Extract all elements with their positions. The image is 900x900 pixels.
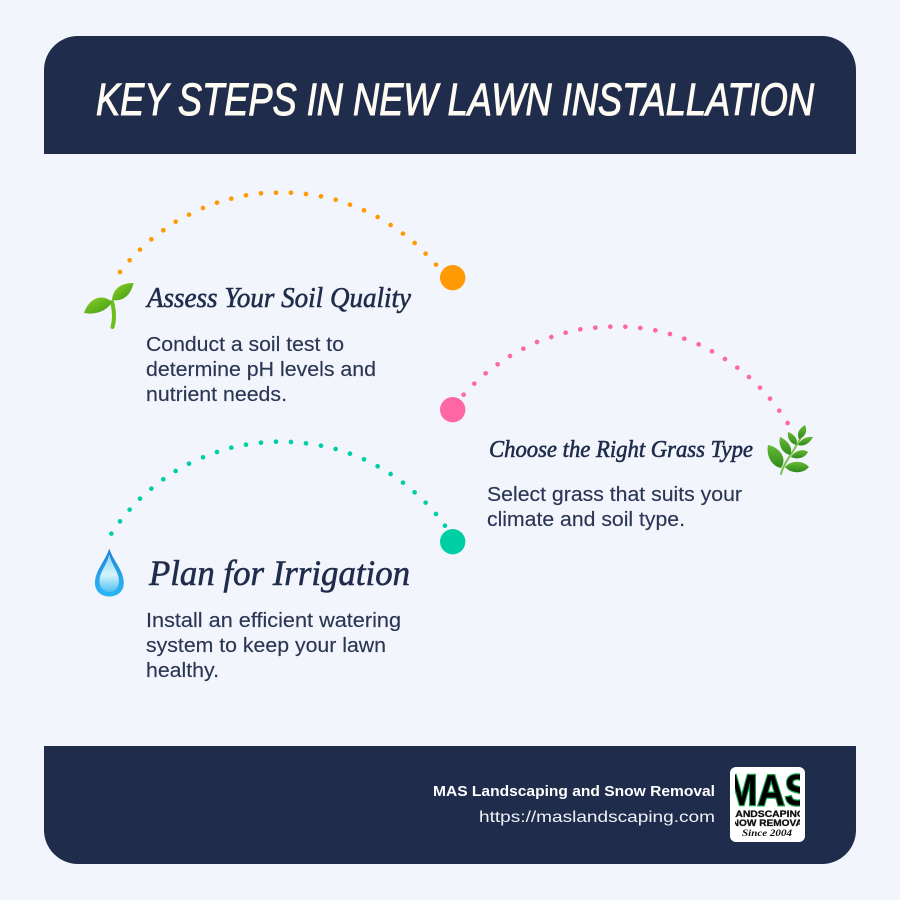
description: nutrient needs.: [146, 384, 287, 406]
company name: MAS Landscaping and Snow Removal: [433, 784, 715, 800]
description: climate and soil type.: [487, 509, 685, 531]
heading: Assess Your Soil Quality: [145, 282, 411, 314]
heading: Plan for Irrigation: [148, 553, 410, 593]
dotted arc: teal: [109, 439, 447, 536]
description: system to keep your lawn: [146, 635, 386, 657]
description: [146, 334, 376, 406]
description: determine pH levels and: [146, 359, 376, 381]
footer banner: [44, 746, 856, 864]
heading: Choose the Right Grass Type: [489, 437, 753, 463]
pink node: [440, 397, 465, 422]
logo: MAS: [726, 766, 810, 815]
description: [146, 610, 401, 682]
step: plan for irrigation: [95, 439, 465, 682]
icon: seedling: [84, 283, 134, 327]
description: Conduct a soil test to: [146, 334, 344, 356]
logo: Since 2004: [742, 829, 792, 839]
description: healthy.: [146, 660, 219, 682]
logo: LANDSCAPING: [729, 809, 805, 820]
orange node: [440, 265, 465, 290]
step: choose grass type: [440, 324, 813, 531]
description: [487, 484, 742, 531]
dotted arc: orange: [118, 190, 438, 274]
icon: water drop: [95, 548, 124, 596]
dotted arc: pink: [461, 324, 790, 425]
teal node: [440, 529, 465, 554]
logo: SNOW REMOVAL: [725, 818, 809, 829]
step: assess soil quality: [84, 190, 465, 406]
description: Install an efficient watering: [146, 610, 401, 632]
logo: [730, 767, 805, 842]
website url: https://maslandscaping.com: [479, 809, 715, 826]
icon: herb: [768, 425, 813, 474]
description: Select grass that suits your: [487, 484, 742, 506]
header banner: [44, 36, 856, 154]
